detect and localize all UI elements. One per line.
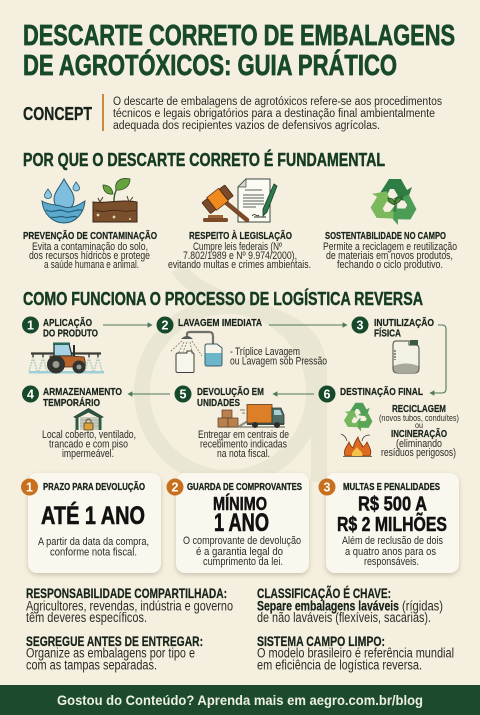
card 1 text [38, 536, 149, 558]
step 4 number: 4 [27, 388, 34, 402]
step 4 title: TEMPORÁRIO [43, 396, 100, 409]
step 2 number: 2 [162, 318, 169, 332]
step 5 title: DEVOLUÇÃO EM [197, 385, 264, 398]
concept text [113, 96, 442, 132]
step 1 [22, 316, 104, 374]
badge 3 [318, 478, 336, 496]
card 2 text [183, 535, 301, 568]
concept text: adequada dos recipientes vazios de defensivos agrícolas. [113, 120, 380, 132]
icon: triple wash [170, 332, 222, 372]
card 2 value: MÍNIMO [213, 493, 267, 514]
card 1 text: conforme nota fiscal. [50, 546, 137, 558]
step 2 title: LAVAGEM IMEDIATA [178, 317, 262, 329]
text: legislation: evitando multas e crimes ambientais. [168, 259, 311, 271]
text: final destinations: ou [415, 421, 423, 430]
card 2 heading: GUARDA DE COMPROVANTES [187, 482, 302, 493]
icon: pen [263, 184, 277, 216]
badge 2 [166, 478, 184, 496]
card 3 value [337, 494, 447, 536]
icon: soil and sprout [93, 178, 137, 222]
title [23, 20, 455, 82]
text: prevention: a saúde humana e animal. [44, 259, 139, 271]
panel: prevention [23, 178, 157, 271]
footer [0, 685, 480, 715]
icon: contract [238, 179, 270, 222]
step 4 title [43, 386, 122, 409]
step 3 title [374, 316, 434, 340]
card 2 value: 1 ANO [214, 509, 269, 537]
text: devolution: na nota fiscal. [217, 448, 270, 460]
heading: legislation: RESPEITO À LEGISLAÇÃO [189, 229, 292, 242]
note: shared responsibility: Agricultores, revendas, indústria e governo [26, 598, 233, 614]
text: final destinations: RECICLAGEM [392, 403, 446, 415]
step 6 title: DESTINAÇÃO FINAL [340, 385, 423, 398]
text: prevention: dos recursos hídricos e protege [29, 250, 150, 262]
card 1 value: ATÉ 1 ANO [41, 501, 145, 530]
step 6 number [318, 386, 336, 402]
text: legislation [168, 241, 311, 271]
watermark: logo [142, 268, 319, 482]
step 3 title: FÍSICA [374, 326, 401, 340]
note: classification: de não laváveis (flexíveis, sacarias). [257, 610, 431, 625]
step 2 [156, 316, 327, 372]
note: shared responsibility: RESPONSABILIDADE COMPARTILHADA: [26, 586, 227, 601]
heading: why: POR QUE O DESCARTE CORRETO É FUNDAMENTAL [23, 149, 385, 170]
note: classification: CLASSIFICAÇÃO É CHAVE: [257, 586, 391, 601]
note: campo limpo: SISTEMA CAMPO LIMPO: [257, 634, 385, 649]
text: sustainability: fechando o ciclo produtivo. [337, 259, 443, 271]
step 3 [352, 316, 434, 373]
step 3 title: INUTILIZAÇÃO [374, 316, 434, 329]
panel: legislation [168, 179, 311, 271]
step 1 title: DO PRODUTO [43, 328, 98, 340]
text: final destinations: resíduos perigosos) [381, 447, 456, 459]
step 6 [318, 385, 459, 459]
card 2 text: O comprovante de devolução [183, 535, 301, 547]
step 5 number: 5 [180, 388, 187, 402]
card 2 value [213, 493, 269, 537]
note: shared responsibility [26, 586, 233, 625]
text: storage: impermeável. [62, 448, 114, 460]
step 4 [22, 386, 136, 460]
badge 1: 1 [26, 480, 33, 494]
arrow: 1 to 2 [103, 324, 152, 326]
text: devolution [198, 429, 289, 460]
note: segregate: SEGREGUE ANTES DE ENTREGAR: [26, 634, 203, 649]
panel: penalties card [318, 473, 459, 573]
concept label: CONCEPT [23, 104, 92, 124]
card 3 text: a quatro anos para os [345, 546, 436, 558]
text: legislation: Cumpre leis federais (Nº [193, 241, 282, 253]
card 3 text [342, 535, 443, 568]
arrow: 3 to 6 [430, 325, 446, 393]
step 1 title [43, 316, 98, 340]
text: final destinations: (eliminando [396, 438, 442, 450]
text: washing methods [230, 346, 327, 368]
badge 3: 3 [324, 480, 331, 494]
panel: receipts card [166, 473, 309, 573]
card 1 text: A partir da data da compra, [38, 536, 149, 548]
text: washing methods: - Tríplice Lavagem [230, 346, 300, 358]
step 5 title [197, 385, 264, 409]
text: storage: Local coberto, ventilado, [42, 429, 136, 441]
note: classification: Separe embalagens laváveis [257, 598, 399, 614]
step 2 number [156, 316, 174, 334]
icon: recycling [365, 179, 421, 229]
concept text: O descarte de embalagens de agrotóxicos refere-se aos procedimentos [113, 96, 442, 108]
icon: boxes and truck [218, 404, 285, 428]
note: segregate: Organize as embalagens por tipo e [26, 646, 195, 660]
concept divider [102, 94, 104, 131]
note: segregate: com as tampas separadas. [26, 658, 157, 672]
step 4 title: ARMAZENAMENTO [43, 386, 122, 398]
icon: pierced jug [393, 340, 419, 373]
heading: prevention: PREVENÇÃO DE CONTAMINAÇÃO [23, 229, 157, 242]
card 2 text: cumprimento da lei. [203, 556, 283, 568]
note: classification [257, 586, 443, 625]
note: campo limpo: em eficiência de logística reversa. [257, 658, 422, 672]
card 3 value: R$ 500 A [358, 494, 427, 516]
arrow: 6 to 5 [273, 393, 314, 395]
concept block [23, 94, 442, 132]
badge 2: 2 [172, 480, 179, 494]
text: legislation: 7.802/1989 e Nº 9.974/2000), [183, 250, 297, 262]
text: final destinations [379, 403, 459, 459]
card 2 text: é a garantia legal do [196, 546, 283, 558]
arrow: 5 to 4 [128, 393, 170, 395]
footer text: Gostou do Conteúdo? Aprenda mais em aegro.com.br/blog [57, 692, 423, 708]
panel: deadline card [21, 473, 161, 573]
icon: fire [341, 434, 372, 456]
icon: recycling small [341, 403, 375, 434]
text: prevention [29, 241, 150, 271]
arrow: 2 to 3 [269, 324, 347, 326]
panel: sustainability [323, 179, 457, 271]
icon: gavel [201, 184, 247, 222]
text: devolution: Entregar em centrais de [198, 429, 289, 441]
step 6 number: 6 [324, 388, 331, 402]
text: sustainability [323, 241, 457, 271]
step 3 number: 3 [357, 318, 364, 332]
icon: tractor spraying [29, 342, 104, 374]
note: segregate [26, 634, 203, 672]
card 1 heading: PRAZO PARA DEVOLUÇÃO [43, 480, 145, 493]
card 3 text: Além de reclusão de dois [342, 535, 443, 547]
text: final destinations: INCINERAÇÃO [391, 427, 447, 440]
text: storage: trancado e com piso [49, 438, 128, 450]
text: washing methods: ou Lavagem sob Pressão [230, 356, 327, 368]
icon: water drop [42, 179, 85, 223]
text: final destinations: (novos tubos, conduítes) [379, 413, 459, 423]
icon: locked warehouse [74, 408, 103, 430]
step 5 [174, 385, 289, 460]
card 3 text: responsáveis. [364, 556, 419, 568]
note: shared responsibility: têm deveres específicos. [26, 610, 147, 625]
step 5 title: UNIDADES [197, 397, 240, 409]
text: devolution: recebimento indicadas [200, 438, 287, 450]
step 1 number: 1 [27, 318, 34, 332]
step 1 title: APLICAÇÃO [43, 316, 92, 329]
card 3 value: R$ 2 MILHÕES [337, 512, 447, 536]
concept text: técnicos e legais obrigatórios para a destinação final ambientalmente [113, 108, 435, 120]
note: classification: (rígidas) [402, 598, 443, 614]
text: storage [42, 429, 136, 460]
card 3 heading: MULTAS E PENALIDADES [343, 482, 440, 493]
text: prevention: Evita a contaminação do solo, [32, 241, 148, 253]
note: campo limpo [257, 634, 454, 672]
